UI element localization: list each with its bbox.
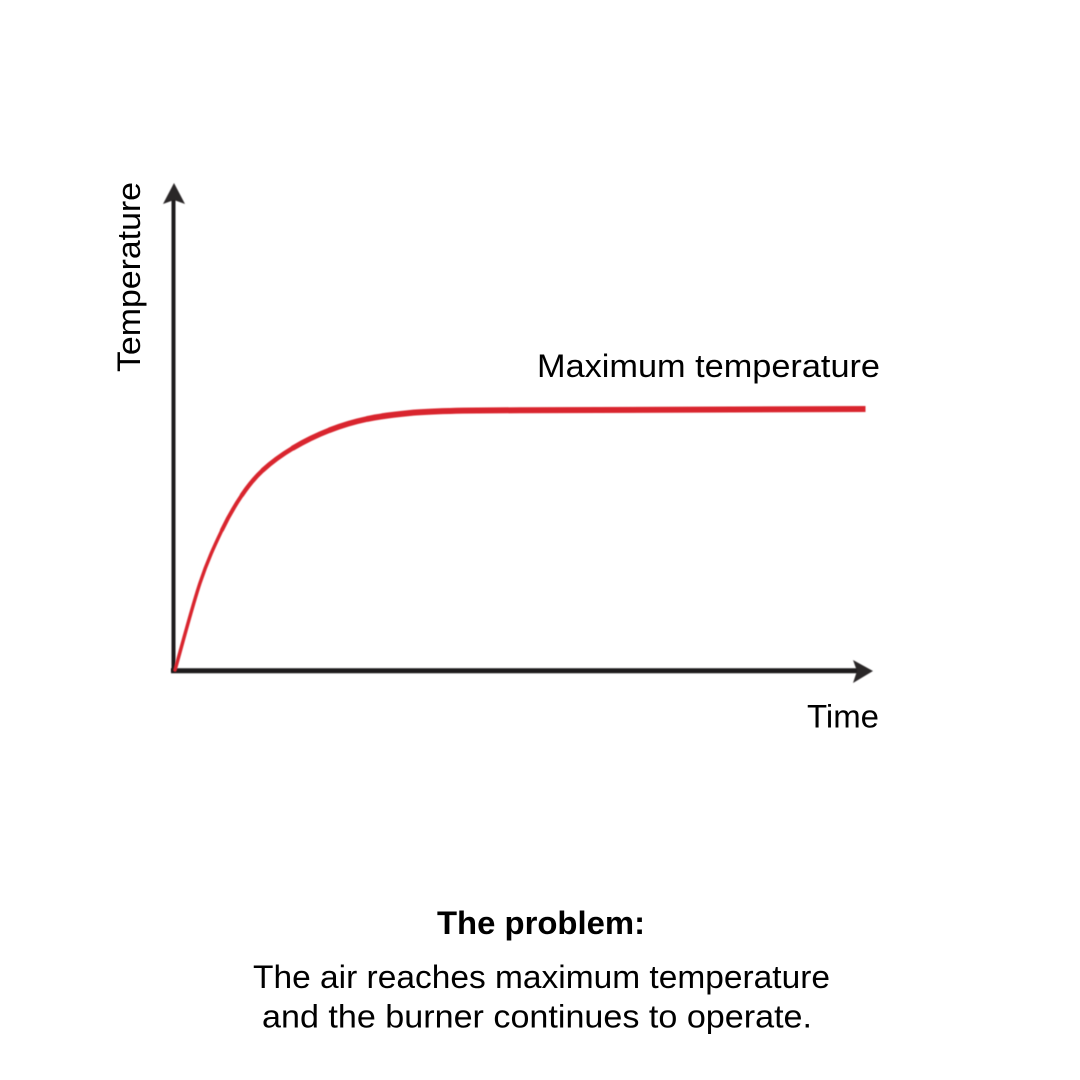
temperature curve [175,409,866,670]
caption body: The air reaches maximum temperature [253,959,830,995]
x axis label: Time [807,698,879,734]
caption body: and the burner continues to operate. [262,998,812,1034]
caption heading: The problem: [437,905,645,941]
caption body [253,959,830,1034]
y axis label: Temperature [111,182,147,372]
y axis arrow [163,183,185,672]
x axis arrow [171,660,873,683]
curve label: Maximum temperature [537,348,880,384]
